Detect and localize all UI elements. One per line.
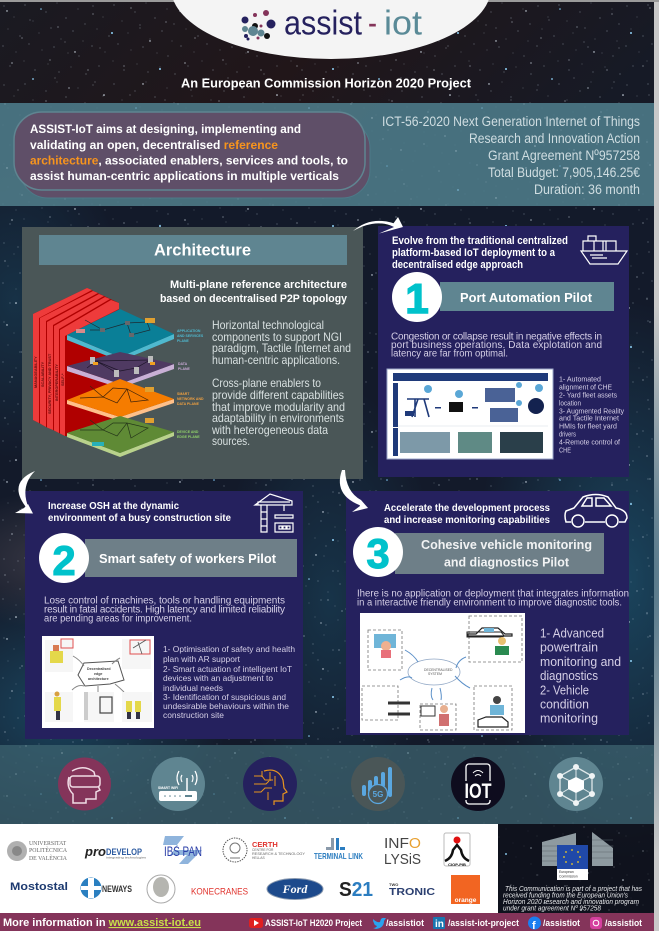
vehicle diagram image: SYSTEM [428, 672, 442, 676]
twitter link [373, 918, 424, 929]
pilot 1 list: 4-Remote control of [559, 438, 621, 446]
safety diagram image: architecture [88, 677, 109, 681]
panel: port automation pilot [378, 226, 629, 477]
icon: ship [581, 236, 627, 264]
architecture heading: Architecture [154, 242, 251, 260]
pilot 1 list: 3- Augmented Reality [559, 406, 624, 416]
logo: IBS PAN [163, 836, 202, 864]
grant details: Duration: 36 month [534, 182, 640, 198]
logo dots [242, 10, 276, 40]
more information: More information in www.assist-iot.eu [3, 917, 201, 929]
logo: TwoTronic: TRONIC [389, 887, 435, 898]
pilot 2 description: result in fatal accidents. High latency and limited reliability [44, 604, 285, 616]
logo: Neways: NEWAYS [102, 884, 132, 894]
European Commission panel [498, 824, 654, 913]
arrow: architecture to pilot 1 [353, 217, 403, 234]
pilot 1 list: drivers [559, 430, 576, 438]
architecture description: paradigm, Tactile Internet and [212, 341, 351, 355]
logo: S21: S21 [339, 879, 373, 901]
architecture description: Cross-plane enablers to [212, 376, 321, 390]
icon: 5G signal: 5G [373, 790, 383, 799]
architecture stack diagram: DEVICE AND [177, 430, 199, 434]
pilot 3 list: condition [540, 696, 589, 712]
pilot 1 heading: decentralised edge approach [392, 259, 523, 271]
icon: wifi router: SMART WIFI [158, 786, 178, 790]
logo: Infolysis: LYSiS [384, 851, 421, 868]
logo: Neways [80, 878, 132, 898]
logo: Ford: Ford [282, 882, 308, 896]
architecture stack diagram: DATA PLANE [177, 402, 200, 406]
logo: Infolysis [384, 835, 421, 868]
EC funding note [503, 886, 642, 912]
logo: Konecranes: KONECRANES [191, 886, 248, 898]
pilot 1 description [391, 332, 602, 360]
pilot 2 list: plan with AR support [163, 655, 241, 664]
logo: IBS PAN: IBS PAN [164, 843, 202, 859]
linkedin link: /assist-iot-project [448, 918, 519, 928]
icon: crane [255, 494, 293, 532]
panel: architecture [22, 227, 363, 479]
aims pill: ASSIST-IoT aims at designing, implementing and [30, 122, 301, 136]
pilot 1 list: HMIs for fleet yard [559, 422, 617, 430]
architecture stack diagram: MANAGEABILITY [34, 356, 38, 388]
architecture stack diagram [33, 288, 204, 457]
twitter link: /assistiot [386, 918, 424, 928]
pilot 3 description: Ihere is no application or deployment that integrates information [357, 588, 629, 600]
logo: Terminal Link [314, 838, 364, 861]
logo ellipse: - [368, 4, 377, 42]
logo wordmark: assist [284, 4, 362, 42]
EC funding note: This Communication is part of a project that has [505, 886, 642, 893]
logo: UPV: DE VALÈNCIA [29, 854, 68, 862]
logo ellipse: iot [384, 4, 423, 42]
icon: virtual reality [58, 758, 111, 810]
number 1 badge: 1 [405, 275, 429, 322]
logo: proDevelop: pro [84, 844, 106, 859]
pilot 2 description [44, 596, 285, 624]
logo: CERTH: CERTH [252, 840, 278, 849]
logo: proDevelop: DEVELOP [106, 847, 142, 857]
EC funding note: Horizon 2020 research and innovation program [503, 899, 639, 906]
EC building and flag: European [559, 870, 574, 874]
grant details: Grant Agreement Nº957258 [488, 148, 640, 164]
vehicle diagram image: DECENTRALISED [424, 668, 453, 672]
aims pill: assist human-centric applications in multiple verticals [30, 169, 339, 183]
logo: Orange: orange [455, 897, 477, 904]
icon: network cube [549, 757, 603, 811]
architecture stack diagram: SMART [177, 392, 190, 396]
linkedin link [433, 917, 519, 930]
number 2 badge: 2 [52, 537, 76, 584]
pilot 2 description: Lose control of machines, tools or handling equipments [44, 596, 285, 606]
logo: Infolysis: INFO [384, 835, 421, 852]
architecture description: adaptability in environments [212, 411, 344, 425]
pilot 3 description [357, 588, 629, 608]
footer bar [0, 913, 654, 931]
logo: Ford [267, 878, 323, 900]
pilot 3 description: in a interactive friendly environment to improve diagnostic tools. [357, 598, 622, 608]
pilot 2 list: 3- Identification of suspicious and [163, 693, 286, 702]
arrow: architecture to pilot 2 [15, 471, 35, 514]
logo: UPV: UNIVERSITAT [29, 841, 67, 847]
pilot 1 list: 1- Automated [559, 374, 601, 384]
arrow: architecture to pilot 3 [340, 470, 368, 512]
number 3 badge: 3 [366, 530, 390, 577]
pilot 1 heading [392, 235, 568, 271]
number 1 badge: Port Automation Pilot [460, 290, 593, 305]
icon: 5G signal [351, 757, 405, 811]
youtube link: ASSIST-IoT H2020 Project [265, 918, 362, 928]
architecture stack diagram: AND SERVICES [177, 334, 204, 338]
architecture stack diagram: PLANE [178, 367, 191, 371]
pilot 3 list: 1- Advanced [540, 626, 604, 640]
pilot 1 list: location [559, 398, 581, 408]
architecture description: that improve modularity and [212, 400, 345, 414]
pilot 3 list: monitoring and [540, 654, 621, 669]
icon: IoT phone [451, 757, 505, 811]
aims pill: architecture, associated enablers, services and tools, to [30, 154, 348, 168]
architecture heading [39, 235, 347, 265]
architecture stack diagram: APPLICATION [177, 329, 201, 333]
logo: CIOP-PIB: CIOP-PIB [448, 862, 466, 867]
pilot 2 heading: environment of a busy construction site [48, 513, 231, 524]
number 1 badge [392, 272, 614, 322]
EC funding note: under grant agreement Nº 957258 [503, 906, 601, 912]
logo: CIOP-PIB [444, 833, 470, 867]
architecture description: with heterogeneous data [211, 423, 328, 437]
logo: CERTH [223, 838, 306, 862]
technology band [0, 745, 654, 824]
EC funding note: received funding from the European Union's [503, 892, 628, 900]
architecture description: sources. [212, 434, 250, 448]
architecture stack diagram: PLANE [177, 339, 190, 343]
number 3 badge [353, 527, 604, 577]
icon: IoT phone: IOT [464, 780, 492, 803]
pilot 1 description: latency are far from optimal. [391, 348, 508, 360]
aims pill [14, 112, 370, 198]
pilot 1 description: Congestion or collapse result in negative effects in [391, 332, 602, 342]
pilot 1 list: CHE [559, 446, 571, 454]
logo: TwoTronic [389, 882, 435, 898]
pilot 2 list: 2- Smart actuation of intelligent IoT [163, 665, 292, 674]
vehicle diagram image [360, 613, 525, 733]
pilot 2 list: devices with an adjustment to [163, 674, 273, 683]
logo: ICCS head [147, 875, 175, 903]
logo: CERTH: CENTRE FOR [252, 848, 274, 852]
pilot 1 list [559, 374, 624, 454]
facebook link [528, 916, 580, 931]
architecture stack diagram: EDGE PLANE [177, 435, 200, 439]
architecture description: Horizontal technological [212, 318, 324, 332]
logo: proDevelop: integrating technologies [106, 856, 147, 860]
panel: smart safety pilot [25, 491, 303, 739]
partner logos panel [0, 824, 498, 913]
architecture stack diagram: SECURITY, PRIVACY AND TRUST [48, 353, 52, 414]
logo: CERTH: RESEARCH & TECHNOLOGY [252, 852, 306, 856]
safety diagram image: edge [94, 672, 102, 676]
pilot 2 description: are pending areas for improvement. [44, 614, 192, 624]
pilot 1 list: 2- Yard fleet assets [559, 390, 617, 400]
pilot 2 heading: Increase OSH at the dynamic [48, 501, 179, 512]
pilot 3 heading: and increase monitoring capabilities [384, 515, 550, 526]
architecture description [211, 318, 351, 448]
architecture subheading [160, 279, 348, 305]
pilot 1 list: and Tactile Internet [559, 414, 620, 422]
architecture stack diagram: SELF-* [61, 373, 65, 386]
number 2 badge: Smart safety of workers Pilot [99, 551, 277, 566]
EC building and flag [542, 832, 613, 880]
pilot 3 list: monitoring [540, 710, 598, 726]
logo: CERTH: HELLAS [252, 856, 265, 860]
pilot 3 list [540, 626, 621, 726]
logo: TwoTronic: TWO [389, 882, 398, 887]
EC building and flag: Commission [559, 874, 578, 878]
safety diagram image [42, 636, 154, 728]
pilot 2 heading [48, 501, 231, 524]
logo: UPV [7, 841, 68, 862]
pilot 3 heading: Accelerate the development process [384, 503, 550, 514]
pilot 1 heading: platform-based IoT deployment to a [392, 247, 556, 259]
icon: car [565, 494, 627, 527]
pilot 2 list: 1- Optimisation of safety and health [163, 645, 295, 654]
instagram link: /assistiot [605, 918, 642, 928]
pilot 1 heading: Evolve from the traditional centralized [392, 235, 568, 247]
number 3 badge: and diagnostics Pilot [444, 554, 570, 570]
architecture description: provide different capabilities [212, 388, 344, 402]
instagram link [590, 917, 642, 929]
logo: UPV: POLITÈCNICA [29, 846, 68, 854]
architecture stack diagram: INTEROPERABILITY [55, 364, 59, 401]
facebook link: /assistiot [543, 918, 580, 928]
aims pill: validating an open, decentralised reference [30, 138, 278, 152]
pilot 3 list: 2- Vehicle [540, 682, 589, 698]
architecture stack diagram: NETWORK AND [177, 397, 204, 401]
grant details [382, 114, 640, 198]
logo ellipse [171, 0, 491, 59]
logo: proDevelop [84, 844, 147, 860]
pilot 2 list: individual needs [163, 684, 223, 693]
logo: Terminal Link: TERMINAL LINK [314, 851, 364, 861]
architecture subheading: Multi-plane reference architecture [170, 279, 347, 291]
project title: An European Commission Horizon 2020 Project [181, 76, 472, 90]
pilot 3 list: powertrain [540, 640, 598, 654]
info band [0, 103, 654, 206]
pilot 2 list [163, 645, 295, 720]
pilot 1 description: port business operations. Data explotation and [391, 340, 602, 351]
architecture stack diagram: SCALABILITY [41, 361, 45, 387]
logo: Orange [451, 875, 480, 904]
safety diagram image: Decentralised [87, 667, 111, 671]
architecture description: human-centric applications. [212, 353, 340, 367]
icon: AI head [243, 757, 297, 811]
panel: vehicle monitoring pilot [346, 491, 629, 735]
architecture description: components to support NGI [212, 330, 342, 344]
architecture stack diagram: DATA [178, 362, 188, 366]
architecture subheading: based on decentralised P2P topology [160, 293, 348, 305]
pilot 2 list: construction site [163, 711, 224, 720]
number 3 badge: Cohesive vehicle monitoring [421, 537, 592, 552]
pilot 3 list: diagnostics [540, 668, 598, 683]
number 2 badge [39, 533, 297, 584]
pilot 1 list: alignment of CHE [559, 382, 612, 392]
pilot 3 heading [384, 503, 550, 526]
logo: Mostostal: Mostostal [10, 881, 68, 893]
linkedin link: in [435, 919, 444, 930]
icon: wifi router [151, 757, 205, 811]
pilot 2 list: undesirable behaviours within the [163, 702, 289, 711]
port diagram image [387, 369, 553, 459]
